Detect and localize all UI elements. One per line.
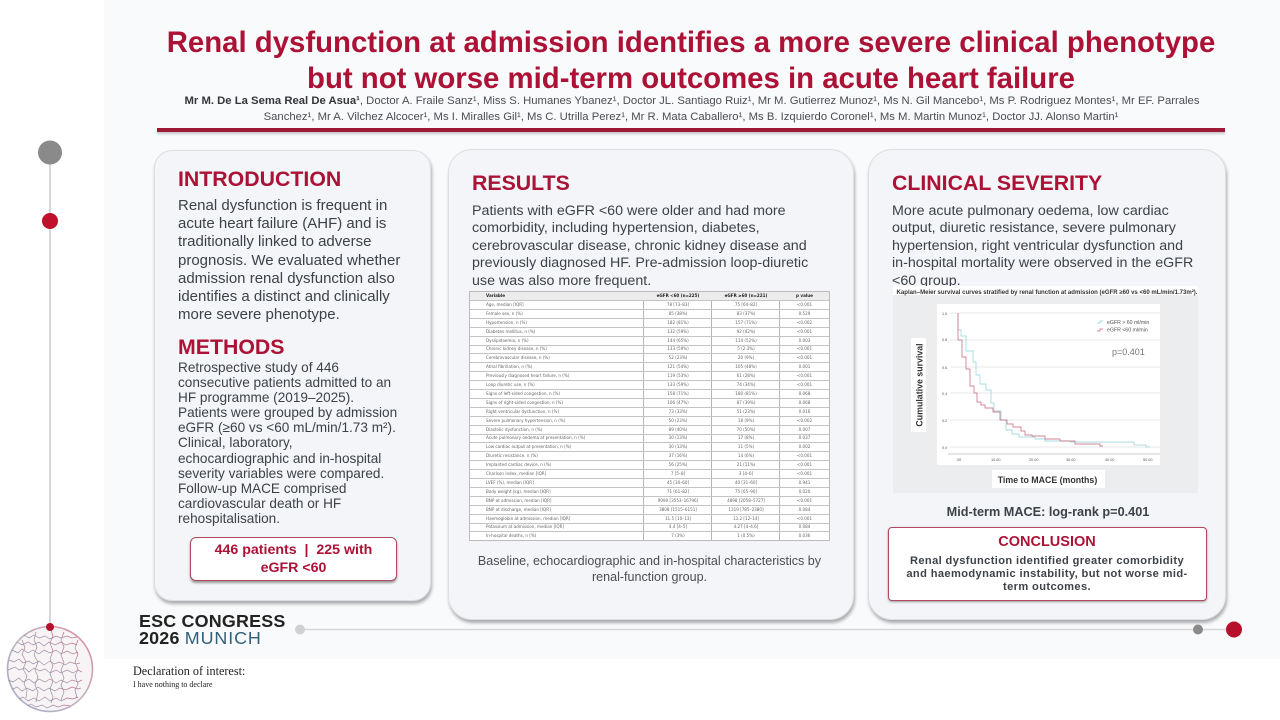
table: baseline characteristics: 0.084 [799,507,810,512]
title rule [157,128,1225,132]
table: baseline characteristics: 114 (52%) [735,338,757,342]
table: baseline characteristics: Right ventricular dysfunction, n (%) [486,409,559,414]
table: baseline characteristics: Diastolic dysfunction, n (%) [486,426,542,432]
chart: Kaplan-Meier survival: 50.00 [1143,458,1153,462]
text: declaration of interest: I have nothing to declare [133,680,213,689]
chart: Kaplan-Meier survival: 0.6 [942,366,947,370]
text: results body [472,202,808,288]
chart: Kaplan-Meier survival: 40.00 [1105,458,1115,462]
text: methods body: consecutive patients admitted to an [178,375,391,390]
table: baseline characteristics: 1319 [785–2380] [728,507,764,512]
text: introduction body [178,197,400,323]
table: baseline characteristics: <0.001 [797,329,812,334]
text: methods body: Patients were grouped by admission [178,405,397,420]
panel: results [448,149,854,620]
table: baseline characteristics: Previously diagnosed heart failure, n (%) [486,373,569,378]
heading: clinical severity: CLINICAL SEVERITY [892,171,1102,195]
table: baseline characteristics: 61 (28%) [737,373,755,378]
y axis label [911,338,926,432]
table: baseline characteristics: Potassium at admission, median [IQR] [486,524,564,529]
callout: patient count [190,537,397,581]
title [167,26,1215,95]
table: baseline characteristics: 87 (39%) [737,400,755,405]
callout: conclusion [888,527,1207,601]
table: baseline characteristics: <0.001 [797,355,812,360]
table: baseline characteristics: Atrial fibrillation, n (%) [486,364,532,369]
table: baseline characteristics: 0.020 [799,489,810,494]
icon: grey node [38,140,62,164]
text: introduction body: prognosis. We evaluated whether [178,252,400,269]
text: methods body: Clinical, laboratory, [178,435,293,450]
table: baseline characteristics: 132 (59%) [667,329,689,334]
table: baseline characteristics: 92 (42%) [737,329,755,334]
text: introduction body: Renal dysfunction is frequent in [178,197,387,214]
panel: introduction and methods [154,150,431,601]
conclusion text [906,555,1188,593]
table: baseline characteristics: 45 [30–60] [667,480,689,485]
chart: Kaplan-Meier survival: 0.4 [942,392,947,396]
legend: eGFR > 60 ml/min [1107,320,1149,326]
table: baseline characteristics: <0.001 [797,453,812,458]
table: baseline characteristics: 37 (16%) [669,453,687,458]
x axis label [992,470,1105,488]
table: baseline characteristics: Body weight (kg), median [IQR] [486,489,551,494]
table: baseline characteristics: Severe pulmonary hypertension, n (%) [486,418,565,423]
text: results body: Patients with eGFR <60 were older and had more [472,202,786,218]
table: baseline characteristics: 182 (81%) [667,320,689,325]
text: methods body: severity variables were compared. [178,466,384,481]
text: clinical severity body: hypertension, right ventricular dysfunction and [892,238,1183,254]
table: baseline characteristics: 30 (13%) [669,444,687,449]
chart title: Kaplan–Meier survival curves stratified by renal function at admission (eGFR ≥60 vs <60 mL/min/1.73m²). [897,289,1198,296]
text: introduction body: more severe phenotype. [178,306,340,323]
table: baseline characteristics: 9090 [3553–16796] [658,498,698,503]
table: baseline characteristics: Diuretic resistance, n (%) [486,453,538,458]
table: baseline characteristics: 144 (65%) [667,338,689,342]
text: table caption [478,554,821,584]
table: baseline characteristics: Age, median [IQR] [486,302,524,307]
text: introduction body: traditionally linked to adverse [178,233,371,250]
table: baseline characteristics: 3808 [1515–6151] [659,507,697,512]
timeline: bottom connector with nodes [295,622,1242,638]
table: baseline characteristics: Implanted cardiac device, n (%) [486,462,551,467]
table: baseline characteristics: p value [796,293,813,298]
conclusion text: term outcomes. [1003,581,1091,593]
table: baseline characteristics: 11 (5%) [738,444,754,449]
table: baseline characteristics: eGFR <60 (n=225) [657,293,699,298]
chart: Kaplan-Meier survival: 0.0 [942,446,947,450]
table: baseline characteristics: Cerebrovascular disease, n (%) [486,355,550,360]
table: baseline characteristics: 133 (59%) [667,382,689,387]
table: baseline characteristics: Acute pulmonary oedema at presentation, n (%) [486,435,585,440]
text: methods body: Follow-up MACE comprised [178,481,346,496]
text: declaration of interest [133,664,245,689]
table: baseline characteristics: Variable [486,293,505,298]
table: baseline characteristics: 0.068 [799,400,810,405]
table: baseline characteristics: Signs of left-sided congestion, n (%) [486,391,560,396]
text: clinical severity body: output, diuretic resistance, severe pulmonary [892,220,1176,236]
table: baseline characteristics: 21 (11%) [737,462,755,467]
table: baseline characteristics: Signs of right-sided congestion, n (%) [486,400,563,405]
text: introduction body: admission renal dysfunction also [178,270,395,287]
text: log-rank result: Mid-term MACE: log-rank p=0.401 [947,505,1149,519]
callout: patient count: eGFR <60 [261,560,326,576]
table: baseline characteristics: 180 (81%) [735,391,757,396]
logo: ESC Congress 2026 Munich: ESC CONGRESS [139,611,286,631]
icon: vascular globe [6,623,94,712]
table: baseline characteristics: BNP at admission, median [IQR] [486,498,552,503]
table: baseline characteristics: Chronic kidney disease, n (%) [486,346,547,351]
table: baseline characteristics: 40 [31–60] [735,480,757,485]
icon: red node [42,213,58,229]
table: baseline characteristics: <0.002 [797,320,812,325]
table: baseline characteristics [469,291,830,541]
table: baseline characteristics: Loop diuretic use, n (%) [486,382,535,387]
conclusion heading: CONCLUSION [998,534,1096,550]
logo: ESC Congress 2026 Munich: 2026 MUNICH [139,628,262,648]
table: baseline characteristics: 75 [65–90] [735,489,757,494]
heading: introduction: INTRODUCTION [178,167,341,191]
text: clinical severity body: More acute pulmonary oedema, low cardiac [892,202,1169,218]
table: baseline characteristics: 106 (47%) [667,400,689,405]
text: clinical severity body: in-hospital mortality were observed in the eGFR [892,255,1193,271]
table: baseline characteristics: 50 (23%) [669,418,687,423]
text: results body: previously diagnosed HF. Pre-admission loop-diuretic [472,255,808,271]
table: baseline characteristics: 17 (8%) [738,435,754,440]
curve: eGFR < 60 [958,313,1103,446]
table: baseline characteristics: 7 (3%) [671,533,685,538]
timeline: left vertical connector with nodes [38,140,62,624]
table: baseline characteristics: <0.001 [797,382,812,387]
chart: Kaplan-Meier survival: 20.00 [1029,458,1039,462]
table: baseline characteristics: 71 [61–82] [667,489,689,494]
table: baseline characteristics: 11.5 [10–13] [665,516,691,520]
table: baseline characteristics: Low cardiac output at presentation, n (%) [486,444,571,449]
chart: Kaplan-Meier survival: 1.0 [942,312,947,316]
chart: Kaplan-Meier survival: 0.8 [942,338,947,342]
table: baseline characteristics: 7 [5–8] [671,471,685,476]
authors [185,95,1200,122]
table: baseline characteristics: LVEF (%), median [IQR] [486,480,534,485]
table: baseline characteristics: 0.068 [799,391,810,396]
table: baseline characteristics: 75 [64–82] [735,302,757,307]
curve: eGFR >= 60 [958,313,1150,447]
table: baseline characteristics: 133 (59%) [667,346,689,351]
table: baseline characteristics: 119 (53%) [667,373,689,378]
heading: methods: METHODS [178,335,284,359]
legend: eGFR <60 ml/min [1107,328,1148,334]
table: baseline characteristics: 20 (9%) [738,355,754,360]
text: results body: comorbidity, including hypertension, diabetes, [472,220,760,236]
authors: Mr M. De La Sema Real De Asua¹, Doctor A. Fraile Sanz¹, Miss S. Humanes Ybanez¹, Doctor JL. Santiago Ruiz¹, Mr M. Gutierrez Munoz¹, Ms N. Gil Mancebo¹, Ms P. Rodriguez Montes¹, Mr EF. Parrales [185,95,1199,107]
text: methods body: echocardiographic and in-hospital [178,451,381,466]
table: baseline characteristics: 0.036 [799,533,810,538]
text: introduction body: acute heart failure (AHF) and is [178,215,386,232]
table: baseline characteristics: Hypertension, n (%) [486,320,527,325]
table: baseline characteristics: 5 (2.3%) [737,346,755,351]
table: baseline characteristics: BNP at discharge, median [IQR] [486,507,551,512]
logo: ESC Congress 2026 Munich [139,611,286,648]
table: baseline characteristics: 18 (9%) [738,418,754,423]
table: baseline characteristics: In-hospital deaths, n (%) [486,533,536,538]
table: baseline characteristics: <0.002 [797,418,812,423]
x axis label: Time to MACE (months) [998,475,1097,485]
table: baseline characteristics: 157 (71%) [735,320,757,325]
table: baseline characteristics: 1 (0.5%) [737,533,755,538]
table: baseline characteristics: 105 (48%) [735,364,757,369]
table: baseline characteristics: <0.001 [797,346,812,351]
title: but not worse mid-term outcomes in acute heart failure [307,62,1075,95]
callout: patient count: 446 patients | 225 with [215,542,372,558]
p value: p=0.401 [1112,347,1145,357]
table: baseline characteristics: 70 (50%) [737,426,755,432]
table: baseline characteristics: Haemoglobin at admission, median [IQR] [486,516,570,520]
authors: Sanchez¹, Mr A. Vilchez Alcocer¹, Ms I. Miralles Gil¹, Ms C. Utrilla Perez¹, Mr R. Mata Caballero¹, Ms B. Izquierdo Coronel¹, Ms M. Martin Munoz¹, Doctor JJ. Alonso Martin¹ [264,110,1118,122]
table: baseline characteristics: eGFR ≥60 (n=221) [725,293,767,298]
table: baseline characteristics: 3 [4–6] [739,471,753,476]
conclusion text: and haemodynamic instability, but not worse mid- [906,568,1188,580]
table: baseline characteristics: 0.037 [799,435,810,440]
chart: Kaplan-Meier survival [893,286,1198,493]
table: baseline characteristics: 4.4 [4–5] [669,524,687,529]
panel: clinical severity [868,149,1226,620]
table: baseline characteristics: Dyslipidaemia, n (%) [486,338,529,342]
table: baseline characteristics: <0.001 [797,516,812,520]
table: baseline characteristics: 0.529 [799,311,810,316]
chart: Kaplan-Meier survival: 0.2 [942,419,947,423]
chart: Kaplan-Meier survival: 30.00 [1066,458,1076,462]
text: methods body: rehospitalisation. [178,511,280,526]
text: results body: cerebrovascular disease, chronic kidney disease and [472,238,807,254]
table: baseline characteristics: 83 (37%) [737,311,755,316]
table: baseline characteristics: 74 (34%) [737,382,755,387]
table: baseline characteristics: Female sex, n (%) [486,311,523,316]
table: baseline characteristics: 13.2 [12–14] [733,516,759,520]
text: methods body [178,360,397,526]
table: baseline characteristics: 4.27 [4–4.6] [734,524,758,529]
chart: Kaplan-Meier survival: .00 [956,458,961,462]
conclusion text: Renal dysfunction identified greater comorbidity [910,555,1184,567]
text: methods body: eGFR (≥60 vs <60 mL/min/1.73 m²). [178,420,396,435]
title: Renal dysfunction at admission identifies a more severe clinical phenotype [167,26,1215,59]
table: baseline characteristics: <0.001 [797,471,812,476]
table: baseline characteristics: 158 (71%) [667,391,689,396]
table: baseline characteristics: <0.001 [797,498,812,503]
text: table caption: Baseline, echocardiographic and in-hospital characteristics by [478,554,821,568]
table: baseline characteristics: 4898 [2058–5727] [727,498,765,503]
table: baseline characteristics: 0.002 [799,444,810,449]
text: declaration of interest: Declaration of interest: [133,664,245,678]
chart: Kaplan-Meier survival: 10.00 [991,458,1001,462]
table: baseline characteristics: <0.001 [797,302,812,307]
text: results body: use was also more frequent. [472,272,651,288]
table: baseline characteristics: 30 (13%) [669,435,687,440]
icon: red knot [46,623,54,631]
table: baseline characteristics: 0.003 [799,338,810,342]
table: baseline characteristics: <0.001 [797,462,812,467]
text: methods body: cardiovascular death or HF [178,496,341,511]
table: baseline characteristics: <0.001 [797,373,812,378]
table: baseline characteristics: Charlson index, median [IQR] [486,471,546,476]
table: baseline characteristics: 14 (6%) [738,453,754,458]
table: baseline characteristics: 0.001 [799,364,810,369]
table: baseline characteristics: 78 [73–83] [667,302,689,307]
table: baseline characteristics: Diabetes mellitus, n (%) [486,329,535,334]
table: baseline characteristics: 0.007 [799,426,810,432]
table: baseline characteristics: 0.016 [799,409,810,414]
table: baseline characteristics: 121 (54%) [667,364,689,369]
legend [1097,320,1149,334]
y axis label: Cumulative survival [914,343,924,427]
heading: results: RESULTS [472,171,570,195]
table: baseline characteristics: 56 (25%) [669,462,687,467]
table: baseline characteristics: 89 (40%) [669,426,687,432]
table: baseline characteristics: 0.941 [799,480,810,485]
table: baseline characteristics: 73 (33%) [669,409,687,414]
table: baseline characteristics: 85 (38%) [669,311,687,316]
text: clinical severity body [892,202,1193,286]
text: introduction body: identifies a distinct and clinically [178,288,390,305]
table: baseline characteristics: 52 (23%) [669,355,687,360]
table: baseline characteristics: 0.084 [799,524,810,529]
text: methods body: Retrospective study of 446 [178,360,339,375]
text: table caption: renal-function group. [592,570,707,584]
table: baseline characteristics: 51 (23%) [737,409,755,414]
text: methods body: HF programme (2019–2025). [178,390,354,405]
